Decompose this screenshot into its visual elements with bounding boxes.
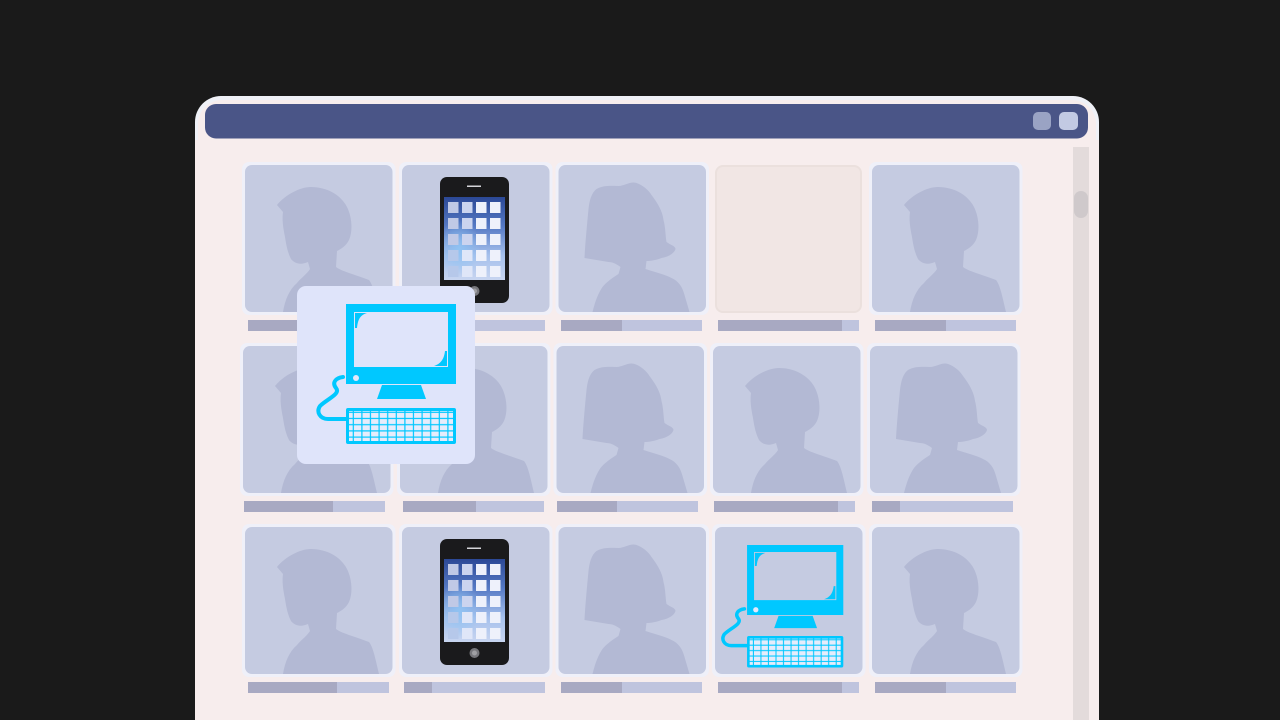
card: male profile (240, 343, 394, 496)
card: phone (399, 162, 552, 315)
title bar (205, 104, 1088, 138)
window button: minimize (1033, 112, 1051, 130)
row 2 of profile cards (240, 343, 1020, 496)
card: male profile (710, 343, 864, 496)
card: female profile (556, 524, 709, 677)
card: male profile (869, 162, 1022, 315)
row 3 progress bars (248, 682, 1016, 693)
card: male profile (397, 343, 550, 496)
popup: enlarged computer card (297, 286, 475, 464)
window button: close (1059, 112, 1078, 130)
card: computer (712, 524, 866, 677)
scrollbar (1073, 147, 1089, 720)
row 1 of profile cards (242, 162, 1022, 315)
row 3 of profile cards (242, 524, 1022, 677)
card: male profile (869, 524, 1022, 677)
card: female profile (554, 343, 707, 496)
row 1 progress bars (248, 320, 1016, 331)
browser window (195, 96, 1099, 720)
card: phone (399, 524, 552, 677)
card: male profile (242, 162, 396, 315)
card: female profile (556, 162, 709, 315)
scrollbar thumb (1074, 191, 1088, 218)
card: empty placeholder (716, 166, 861, 312)
row 2 progress bars (244, 501, 1013, 512)
card: female profile (867, 343, 1020, 496)
card: male profile (242, 524, 396, 677)
icon: desktop computer with keyboard (318, 304, 456, 444)
